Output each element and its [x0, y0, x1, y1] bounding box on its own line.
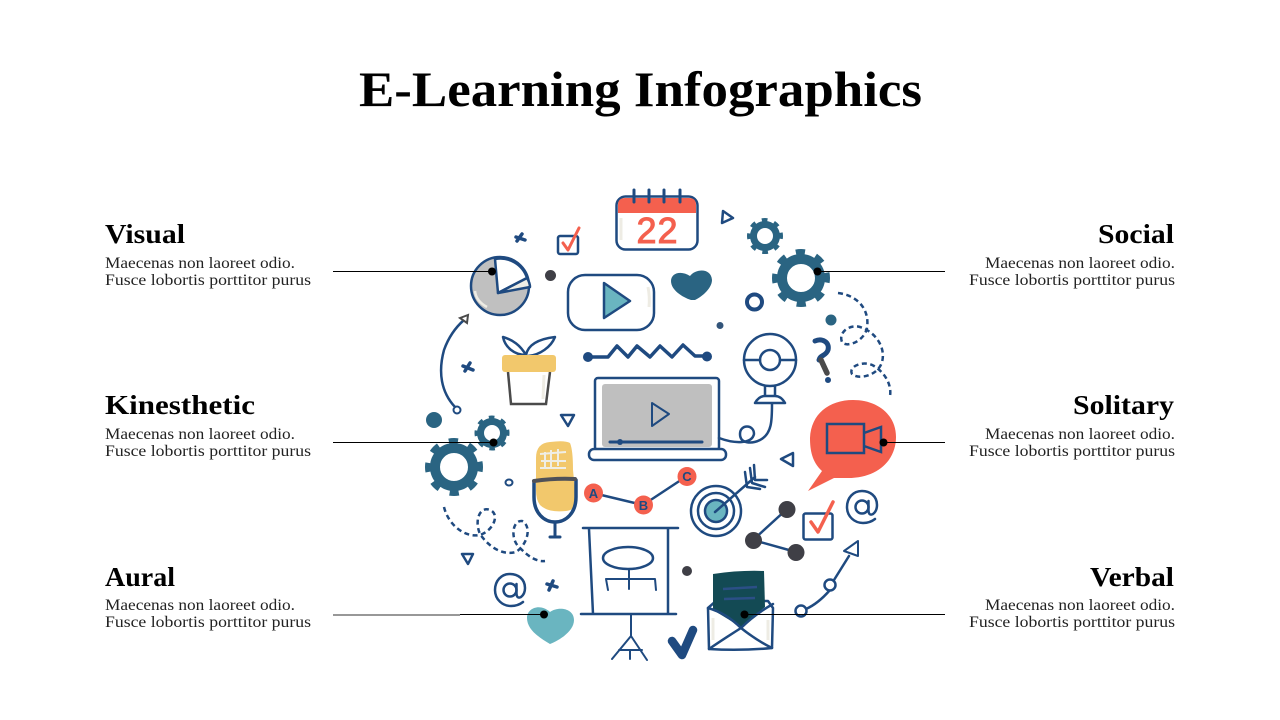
text block: Visual: Fusce lobortis porttitor purus	[105, 272, 311, 289]
icon: left small gear	[476, 418, 508, 448]
text block: Kinesthetic: Kinesthetic	[105, 390, 255, 420]
icon: zigzag line	[583, 345, 712, 362]
text block: Social: Fusce lobortis porttitor purus	[969, 272, 1175, 289]
title: E-Learning Infographics	[359, 61, 922, 117]
icon: dark dot	[682, 566, 692, 576]
connector: Solitary	[880, 438, 945, 446]
icon: dark dot	[545, 270, 556, 281]
text block: Solitary: Solitary	[1073, 390, 1175, 420]
icon: triangle	[561, 415, 574, 426]
icon: tiny ring	[506, 480, 512, 486]
icon: presentation board	[581, 528, 678, 660]
icon: small checkbox	[558, 228, 579, 254]
icon: large checkbox	[804, 502, 833, 540]
icon: big check	[672, 630, 693, 655]
icon: question mark	[815, 340, 831, 383]
connector: Social	[814, 268, 945, 276]
icon: heart dark	[671, 270, 712, 300]
text block: Aural	[105, 562, 311, 631]
text block: Visual: Visual	[105, 219, 186, 249]
text block: Visual	[105, 219, 311, 289]
text block: Aural: Aural	[105, 562, 176, 592]
icon: speech bubble with camera	[808, 400, 896, 491]
text block: Verbal: Verbal	[1090, 562, 1175, 592]
connector: Kinesthetic	[333, 438, 498, 446]
text block: Kinesthetic: Fusce lobortis porttitor purus	[105, 443, 311, 460]
text block: Kinesthetic	[105, 390, 311, 460]
icon: small dot	[716, 322, 724, 329]
icon: laptop	[589, 378, 726, 460]
icon: at sign right	[847, 491, 877, 523]
icon: A B C nodes: A	[589, 486, 599, 501]
text block: Social: Social	[1098, 219, 1175, 249]
text block: Social: Maecenas non laoreet odio.	[985, 255, 1175, 272]
icon: envelope	[708, 571, 773, 650]
icon: blue cross	[516, 234, 525, 241]
icon: teal dot	[826, 314, 836, 326]
text block: Verbal: Fusce lobortis porttitor purus	[969, 614, 1175, 631]
text block: Aural: Fusce lobortis porttitor purus	[105, 614, 311, 631]
icon: calendar	[616, 190, 698, 251]
icon: curved arrow right	[796, 541, 858, 616]
icon: A B C nodes	[584, 467, 696, 514]
text block: Visual: Maecenas non laoreet odio.	[105, 255, 295, 272]
connector: Verbal	[740, 610, 945, 618]
icon: webcam	[719, 334, 796, 442]
icon: blue cross	[463, 363, 473, 371]
icon: microphone	[534, 441, 576, 537]
icon: small gear top	[749, 220, 781, 252]
icon: blue cross	[547, 581, 557, 590]
icon: triangle right	[781, 453, 793, 466]
connector: Visual	[333, 268, 496, 276]
text block: Social	[969, 219, 1175, 289]
icon: curved arrow left	[441, 315, 468, 414]
text block: Solitary: Maecenas non laoreet odio.	[985, 426, 1175, 443]
icon: heart teal	[527, 607, 574, 644]
text block: Solitary: Fusce lobortis porttitor purus	[969, 443, 1175, 460]
icon: dashed loops bottom left	[444, 507, 545, 561]
text block: Verbal	[969, 562, 1175, 631]
icon: dashed loops top right	[838, 293, 890, 396]
icon: plant pot	[502, 337, 556, 404]
icon: pie chart	[471, 257, 530, 315]
icon: network nodes	[745, 501, 804, 561]
icon: A B C nodes: B	[639, 498, 648, 513]
text block: Verbal: Maecenas non laoreet odio.	[985, 597, 1175, 614]
icon: big gear top	[775, 252, 827, 304]
icon: at sign left	[495, 574, 525, 606]
icon: A B C nodes: C	[682, 469, 692, 484]
connector: Aural	[333, 610, 548, 618]
icon: teal circle	[426, 412, 442, 428]
icon: ring	[747, 294, 762, 310]
icon: triangle bottom left	[462, 554, 473, 564]
text block: Kinesthetic: Maecenas non laoreet odio.	[105, 426, 295, 443]
icon: triangle top	[722, 211, 733, 223]
icon: target with arrow	[691, 465, 767, 536]
icon: calendar: 22	[636, 210, 679, 251]
text block: Solitary	[969, 390, 1175, 460]
icon: left big gear	[428, 441, 480, 493]
text block: Aural: Maecenas non laoreet odio.	[105, 597, 295, 614]
icon: video play button	[568, 275, 654, 330]
